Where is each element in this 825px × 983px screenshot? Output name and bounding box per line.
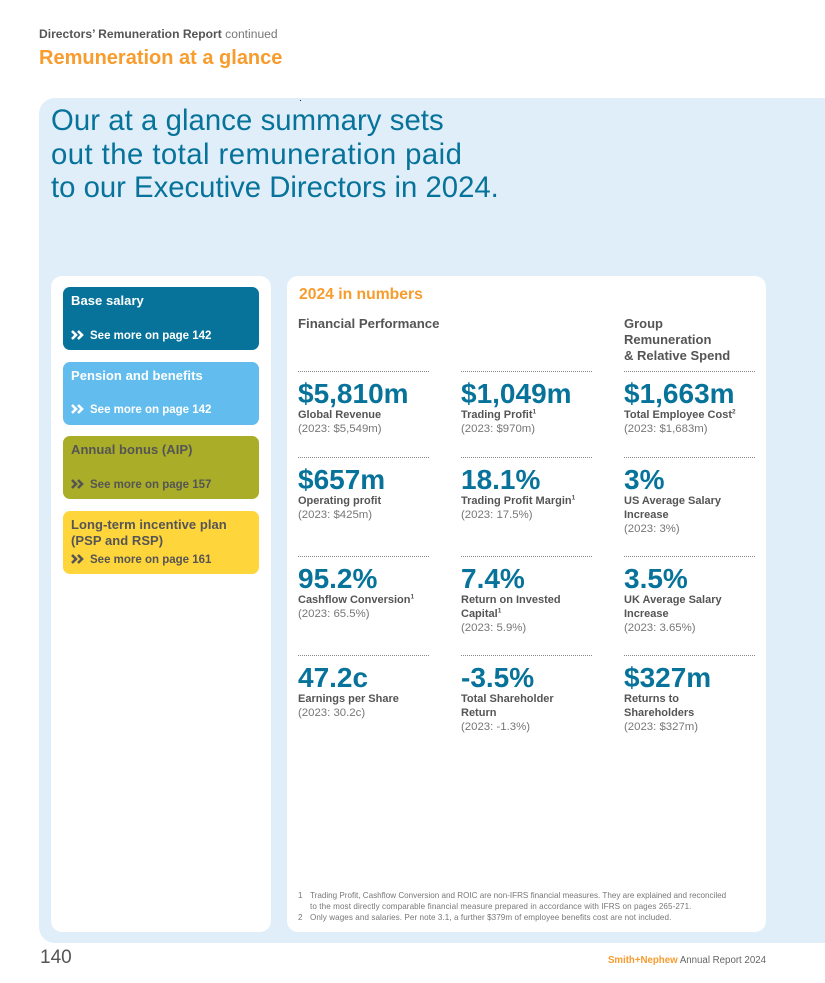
text: (2023: 3%) <box>624 523 680 535</box>
text: (2023: $327m) <box>624 721 698 733</box>
stat: returns to shareholders <box>624 655 755 733</box>
card: long-term incentive plan: See more on page 161 <box>90 554 211 566</box>
footnotes <box>298 891 726 922</box>
running header: Directors’ Remuneration Report continued <box>39 27 278 41</box>
text: 7.4% <box>461 563 525 594</box>
column heading: group remuneration: Group <box>624 316 663 331</box>
text: 3.5% <box>624 563 688 594</box>
card: long-term incentive plan: Long-term incentive plan <box>71 517 227 532</box>
text: $1,049m <box>461 378 572 409</box>
text: Trading Profit Margin1 <box>461 494 575 507</box>
stat: return on invested capital <box>461 556 592 634</box>
card: annual bonus: See more on page 157 <box>90 479 211 491</box>
text: Capital1 <box>461 607 501 620</box>
text: Return <box>461 707 496 719</box>
text: (2023: $1,683m) <box>624 423 708 435</box>
stat: trading profit <box>461 371 592 435</box>
card: base salary: See more on page 142 <box>90 330 211 342</box>
intro heading: out the total remuneration paid <box>51 138 462 171</box>
intro heading <box>51 104 499 204</box>
text: Returns to <box>624 693 679 705</box>
footer report name: Smith+Nephew Annual Report 2024 <box>608 955 766 966</box>
card: long-term incentive plan <box>63 511 259 574</box>
text: (2023: 5.9%) <box>461 622 526 634</box>
text: (2023: $5,549m) <box>298 423 382 435</box>
text: (2023: $970m) <box>461 423 535 435</box>
footnotes: Trading Profit, Cashflow Conversion and ROIC are non-IFRS financial measures. They are explained and reconciled <box>310 891 726 900</box>
text: (2023: $425m) <box>298 509 372 521</box>
text: (2023: 30.2c) <box>298 707 365 719</box>
card: pension and benefits: See more on page 142 <box>90 404 211 416</box>
text: Shareholders <box>624 707 694 719</box>
stat: total shareholder return <box>461 655 592 733</box>
stat: trading profit margin <box>461 457 592 521</box>
card: annual bonus: Annual bonus (AIP) <box>71 442 192 457</box>
stat: earnings per share <box>298 655 429 719</box>
page title: Remuneration at a glance <box>39 47 282 69</box>
card: base salary <box>63 287 259 350</box>
text: $5,810m <box>298 378 409 409</box>
panel: 2024 in numbers <box>287 276 766 932</box>
text: $1,663m <box>624 378 735 409</box>
text: Total Employee Cost2 <box>624 408 736 421</box>
text: $327m <box>624 662 711 693</box>
stat: global revenue <box>298 371 429 435</box>
footnotes: 1 <box>298 891 303 900</box>
text: 95.2% <box>298 563 377 594</box>
text: Global Revenue <box>298 409 381 421</box>
text: Cashflow Conversion1 <box>298 593 414 606</box>
footnotes: Only wages and salaries. Per note 3.1, a further $379m of employee benefits cost are not included. <box>310 913 671 922</box>
text: (2023: 17.5%) <box>461 509 533 521</box>
intro heading: Our at a glance summary sets <box>51 104 444 137</box>
column heading: group remuneration <box>624 316 730 363</box>
text: Earnings per Share <box>298 693 399 705</box>
text: Total Shareholder <box>461 693 554 705</box>
text: Increase <box>624 509 669 521</box>
text: $657m <box>298 464 385 495</box>
card: pension and benefits <box>63 362 259 425</box>
text: -3.5% <box>461 662 534 693</box>
stat: cashflow conversion <box>298 556 429 620</box>
stray dot <box>300 100 301 101</box>
column heading: group remuneration: & Relative Spend <box>624 348 730 363</box>
card: long-term incentive plan: (PSP and RSP) <box>71 533 163 548</box>
text: Trading Profit1 <box>461 408 536 421</box>
text: 47.2c <box>298 662 368 693</box>
text: (2023: -1.3%) <box>461 721 530 733</box>
footnotes: to the most directly comparable financial measure prepared in accordance with IFRS on pages 265-271. <box>310 902 692 911</box>
stat: UK salary increase <box>624 556 755 634</box>
column heading: financial performance: Financial Performance <box>298 316 439 331</box>
column heading: group remuneration: Remuneration <box>624 332 711 347</box>
text: Return on Invested <box>461 594 561 606</box>
text: (2023: 65.5%) <box>298 608 370 620</box>
card: pension and benefits: Pension and benefits <box>71 368 203 383</box>
panel heading: 2024 in numbers <box>299 286 423 303</box>
stat: total employee cost <box>624 371 755 435</box>
card: annual bonus <box>63 436 259 499</box>
text: Operating profit <box>298 495 381 507</box>
stat: US salary increase <box>624 457 755 535</box>
text: Increase <box>624 608 669 620</box>
footnotes: 2 <box>298 913 303 922</box>
text: 3% <box>624 464 664 495</box>
stat: operating profit <box>298 457 429 521</box>
intro heading: to our Executive Directors in 2024. <box>51 171 499 204</box>
text: (2023: 3.65%) <box>624 622 696 634</box>
text: US Average Salary <box>624 495 721 507</box>
text: 18.1% <box>461 464 540 495</box>
text: UK Average Salary <box>624 594 722 606</box>
panel: remuneration components <box>51 276 271 932</box>
card: base salary: Base salary <box>71 293 144 308</box>
page number: 140 <box>40 947 72 968</box>
